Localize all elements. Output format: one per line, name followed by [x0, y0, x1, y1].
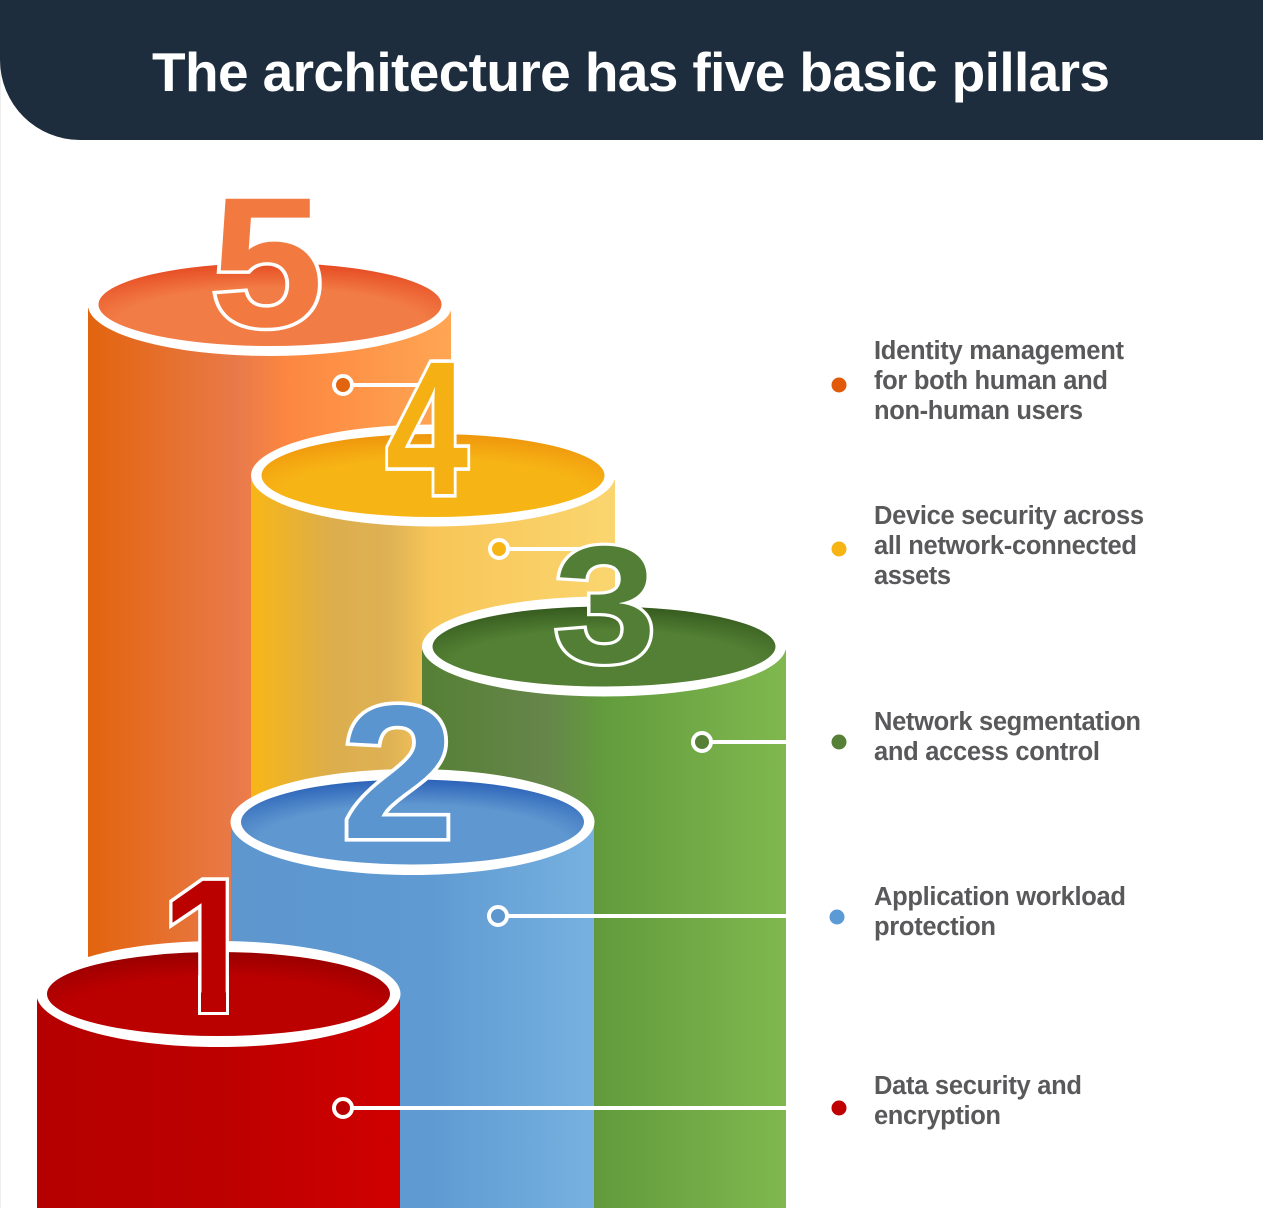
legend item: application — [830, 883, 1126, 941]
pillar 2: blue — [230, 666, 786, 1208]
legend item: identity — [832, 337, 1124, 425]
pillar 5: orange: 5 — [210, 160, 324, 366]
legend item: data: Data security and — [874, 1072, 1082, 1100]
legend item: application: protection — [874, 913, 996, 941]
title: The architecture has five basic pillars — [152, 41, 1110, 103]
pillar 3: green: 3 — [554, 513, 656, 698]
pillar 3: green — [422, 513, 786, 1208]
legend item: identity: non-human users — [874, 397, 1083, 425]
pillar 4: yellow: 4 — [386, 323, 468, 535]
legend item: identity: Identity management — [874, 337, 1124, 365]
legend item: device: assets — [874, 562, 951, 590]
pillar 2: blue: 2 — [341, 666, 455, 879]
legend item: data: encryption — [874, 1102, 1001, 1130]
pillar 1: red: 1 — [160, 839, 258, 1053]
legend item: network: and access control — [874, 738, 1100, 766]
legend item: application: Application workload — [874, 883, 1126, 911]
header banner — [0, 0, 1263, 140]
legend item: network — [832, 708, 1141, 766]
pillar 1: red — [37, 877, 786, 1208]
legend item: network: Network segmentation — [874, 708, 1141, 736]
legend item: identity: for both human and — [874, 367, 1108, 395]
legend item: device: all network-connected — [874, 532, 1137, 560]
pillar 5: orange — [88, 160, 786, 1208]
legend item: data — [832, 1072, 1082, 1130]
legend item: device: Device security across — [874, 502, 1144, 530]
pillar 4: yellow — [251, 323, 786, 1208]
legend item: device — [832, 502, 1144, 590]
